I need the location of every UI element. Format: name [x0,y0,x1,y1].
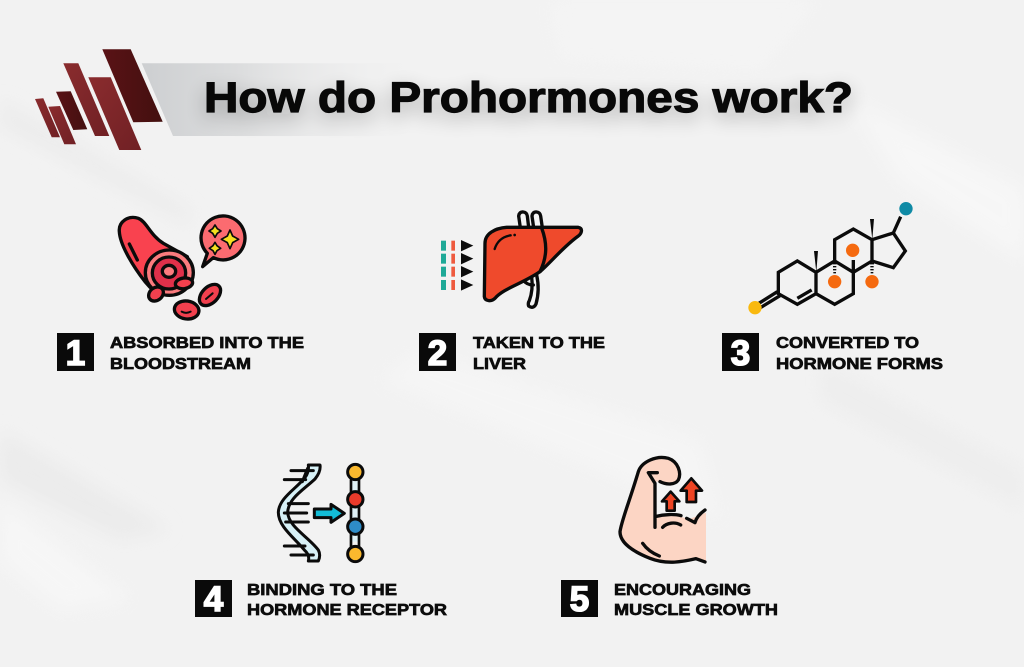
number badge 5 [561,580,598,619]
label: step 4: BINDING TO THE [247,582,397,599]
label: step 2 [473,335,605,373]
label: step 5 [614,582,778,619]
title shadow: How do Prohormones work? [204,81,853,129]
icon: blood vessel with cells [119,216,245,321]
label: step 1: ABSORBED INTO THE [110,335,304,352]
label: step 5: MUSCLE GROWTH [614,602,778,619]
number badge 4: 4 [204,580,224,619]
number badge 3: 3 [731,334,750,373]
label: step 4 [247,582,448,619]
label: step 1 [110,335,304,373]
number badge 4 [195,580,232,619]
number badge 5: 5 [570,580,589,619]
icon: DNA and receptor [278,464,363,562]
number badge 2: 2 [428,334,447,373]
title: How do Prohormones work? [204,74,853,122]
label: step 2: LIVER [473,356,526,373]
icon: flexed arm with arrows [620,457,706,562]
label: step 3: CONVERTED TO [776,335,919,352]
icon: liver [441,212,581,307]
number badge 1: 1 [66,334,85,373]
icon: steroid molecule [748,202,913,314]
title banner [142,63,425,136]
label: step 5: ENCOURAGING [614,582,751,599]
number badge 2 [419,333,456,373]
label: step 1: BLOODSTREAM [110,356,251,373]
number badge 1 [57,333,94,373]
label: step 2: TAKEN TO THE [473,335,605,352]
label: step 4: HORMONE RECEPTOR [247,602,448,619]
label: step 3: HORMONE FORMS [776,356,943,373]
logo [35,49,163,150]
number badge 3 [722,333,759,373]
label: step 3 [776,335,943,373]
